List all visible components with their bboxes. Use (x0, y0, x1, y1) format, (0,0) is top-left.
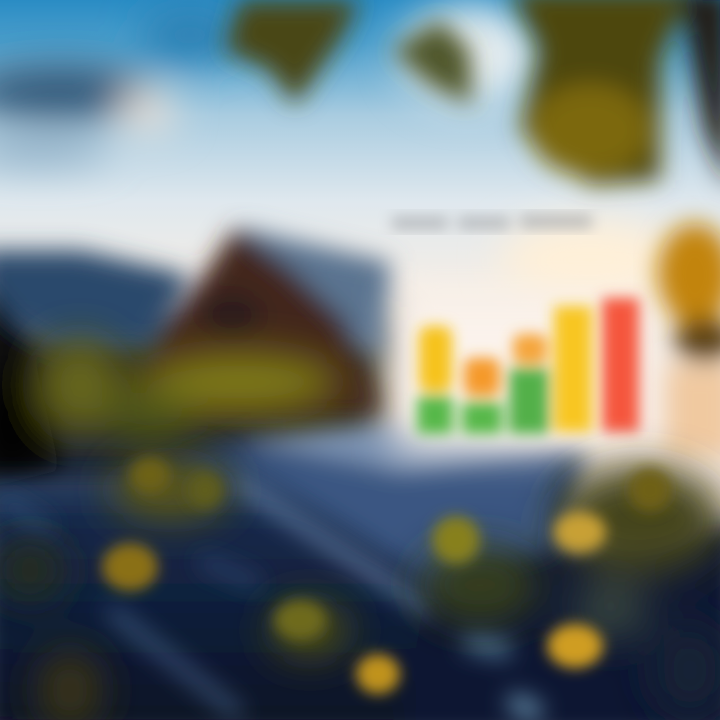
house: roofs and gable (0, 228, 390, 490)
bar 5 red (602, 298, 639, 432)
bokeh highlights (102, 457, 672, 694)
chart glow backdrop (395, 300, 645, 450)
top leaves (225, 0, 720, 190)
faint chart title (392, 214, 592, 230)
solar panel grid lines (0, 480, 540, 715)
bar 1 green (417, 396, 453, 434)
foliage in front of house (0, 339, 340, 477)
bar chart (417, 298, 639, 434)
bar 3 green (509, 368, 549, 434)
bar 1 yellow (419, 326, 452, 392)
right side orange leaf (657, 223, 720, 455)
bar 2 green (462, 402, 502, 434)
clouds (0, 5, 680, 300)
foreground bokeh foliage (0, 460, 720, 720)
solar panel ground (0, 420, 720, 720)
bar 2 orange (464, 358, 500, 396)
dark base behind house and foliage (0, 320, 390, 510)
bar 3 orange (513, 334, 547, 364)
bar 4 yellow (554, 306, 592, 432)
